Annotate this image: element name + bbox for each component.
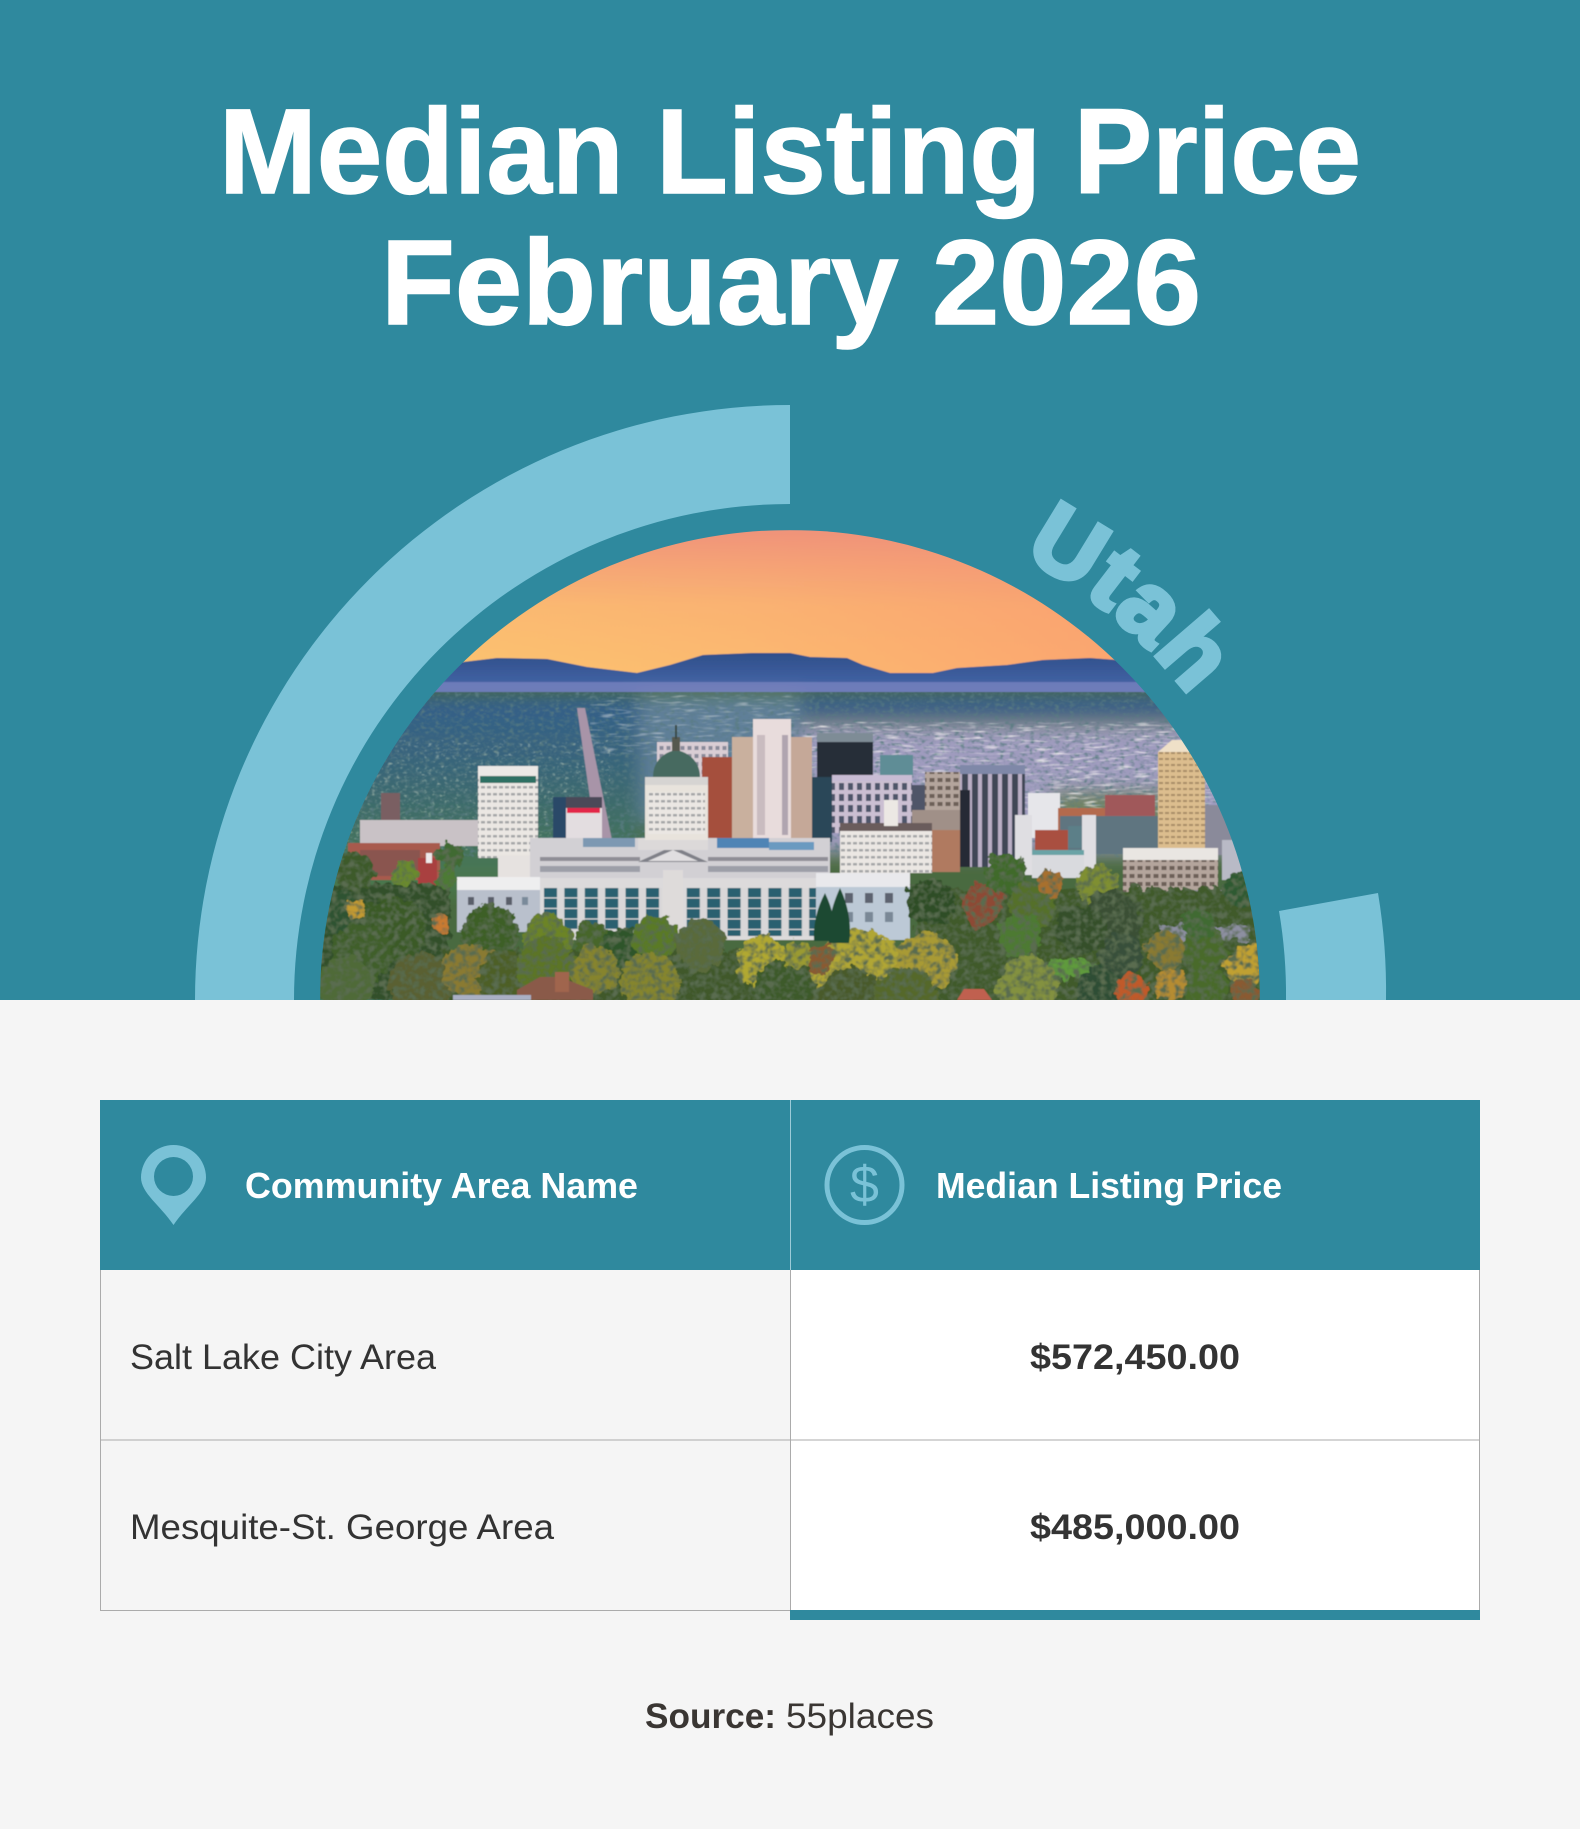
heading: median listing price: Median Listing Price bbox=[936, 1165, 1282, 1206]
teal header panel bbox=[0, 0, 1580, 1000]
haze band bbox=[430, 682, 1160, 692]
title: Median Listing Price bbox=[219, 83, 1361, 219]
sky bbox=[462, 530, 1116, 674]
accent bar under price column bbox=[790, 1610, 1480, 1620]
value column background bbox=[790, 1270, 1480, 1610]
source note: 55places bbox=[786, 1697, 934, 1736]
right low building bbox=[1123, 860, 1218, 892]
row: Salt Lake City Area bbox=[130, 1338, 1240, 1377]
decorative ring arcs bbox=[195, 405, 1386, 1000]
curved label: Utah: Utah bbox=[1033, 498, 1222, 694]
row: Salt Lake City Area: Salt Lake City Area bbox=[130, 1338, 437, 1377]
heading: community area name: Community Area Name bbox=[245, 1165, 638, 1206]
title: February 2026 bbox=[381, 214, 1201, 350]
capitol building bbox=[457, 725, 1250, 942]
left buildings bbox=[381, 793, 400, 821]
row: Mesquite-St. George Area: Mesquite-St. George Area bbox=[130, 1508, 555, 1547]
table header row bbox=[100, 1100, 1480, 1270]
main street bbox=[577, 708, 612, 840]
icon: location pin bbox=[141, 1145, 206, 1225]
row: Mesquite-St. George Area: $485,000.00 bbox=[1030, 1508, 1240, 1547]
trees and foliage bbox=[320, 839, 1260, 1000]
photo: Salt Lake City skyline in dome bbox=[320, 530, 1260, 1000]
cypress trees bbox=[814, 888, 850, 943]
title bbox=[219, 83, 1361, 350]
mountains bbox=[435, 652, 1145, 692]
icon: dollar coin: $ bbox=[850, 1156, 879, 1214]
row: Mesquite-St. George Area bbox=[130, 1508, 1240, 1547]
table bbox=[100, 1100, 1480, 1620]
temple bbox=[1035, 830, 1068, 850]
downtown towers bbox=[657, 742, 728, 778]
row: Salt Lake City Area: $572,450.00 bbox=[1030, 1338, 1240, 1377]
source note: Source: bbox=[645, 1697, 776, 1736]
source note bbox=[645, 1697, 934, 1736]
city texture bbox=[320, 692, 1260, 857]
icon: dollar coin bbox=[827, 1148, 902, 1222]
rooftops in foreground bbox=[453, 972, 992, 1000]
valley floor bbox=[320, 692, 1260, 1000]
table grid lines bbox=[100, 1270, 1480, 1610]
white church block bbox=[839, 830, 933, 874]
